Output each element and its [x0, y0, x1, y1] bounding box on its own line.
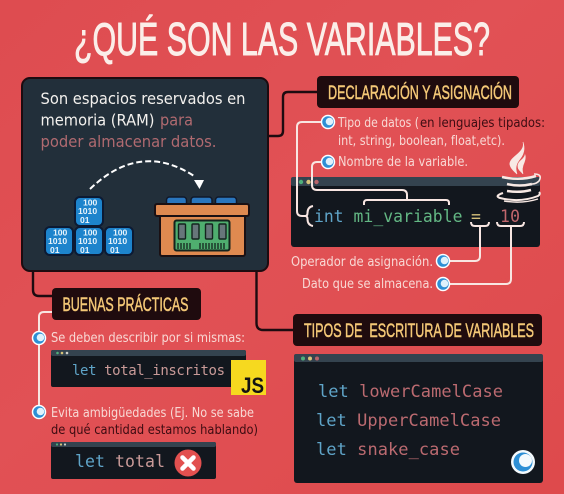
icon: java cup — [498, 142, 540, 202]
code window: total_inscritos — [51, 350, 246, 387]
icon: binary data blocks: 100 — [83, 198, 98, 208]
icon: binary data blocks: 1010 — [78, 206, 97, 216]
icon: dashed arrow from data to memory — [90, 161, 204, 189]
text: se deben describir: Se deben describir por si mismas: — [51, 331, 245, 346]
code lines: camel and snake case: let lowerCamelCase — [318, 382, 503, 402]
icon: binary data blocks: 100 — [53, 228, 68, 238]
heading: buenas prácticas: BUENAS PRÁCTICAS — [62, 293, 188, 316]
icon: bullet ambigüedades — [32, 406, 46, 418]
icon: binary data blocks: 1010 — [78, 236, 97, 246]
code lines: camel and snake case — [316, 382, 503, 460]
icon: binary data blocks: 01 — [110, 245, 120, 255]
icon: binary data blocks: 01 — [50, 245, 60, 255]
code: int mi_variable = 10 — [314, 207, 520, 226]
code: let total: let total — [75, 452, 165, 471]
icon: bullet describir — [32, 332, 46, 344]
connector: panel to declaration heading — [269, 92, 317, 136]
code lines: camel and snake case: let UpperCamelCase — [316, 411, 501, 431]
timeline: good practices — [39, 312, 52, 408]
code: int mi_variable = 10: mi_variable — [354, 207, 462, 226]
text: dato que se almacena: Dato que se almacena. — [302, 277, 433, 292]
icon: binary data blocks: 1010 — [108, 236, 127, 246]
icon: javascript logo: JS — [241, 373, 264, 398]
text: evita ambigüedades: Evita ambigüedades (Ej. No se sabe — [51, 406, 254, 421]
definition text: para — [160, 110, 193, 130]
code lines: camel and snake case: let snake_case — [316, 440, 460, 460]
code: int mi_variable = 10: 10 — [500, 207, 520, 226]
text: tipo de datos: int, string, boolean, float,etc). — [338, 134, 505, 149]
definition text: Son espacios reservados en — [40, 89, 246, 108]
icon: binary data blocks: 01 — [80, 215, 90, 225]
text: tipo de datos — [337, 116, 545, 149]
annotation lines: declaration parts — [297, 122, 524, 284]
icon: binary data blocks: 01 — [80, 245, 90, 255]
heading: tipos de escritura — [293, 314, 542, 346]
icon: binary data blocks: 1010 — [48, 236, 67, 246]
text: tipo de datos: Tipo de datos ( — [337, 116, 419, 131]
text: evita ambigüedades — [51, 406, 258, 438]
definition text: poder almacenar datos. — [40, 132, 216, 151]
heading: buenas prácticas — [52, 288, 201, 320]
icon: memory module in box — [155, 197, 249, 256]
text: operador de asignación: Operador de asignación. — [291, 254, 433, 270]
icon: binary data blocks: 100 — [113, 228, 128, 238]
code window: naming styles — [294, 354, 543, 483]
icon: bullet dato — [436, 278, 450, 290]
icon: binary data blocks — [45, 197, 133, 255]
text: evita ambigüedades: de qué cantidad estamos hablando) — [51, 422, 258, 438]
icon: javascript logo — [231, 360, 266, 398]
code: let total_inscritos: let total_inscritos — [72, 363, 225, 379]
code: int mi_variable = 10: = — [471, 207, 481, 226]
text: tipo de datos: en lenguajes tipados: — [420, 116, 545, 131]
heading: declaración y asignación — [317, 76, 519, 108]
text: nombre de la variable: Nombre de la variable. — [338, 155, 468, 170]
connector: panel to good practices heading — [33, 271, 53, 296]
code window: let total — [51, 442, 216, 479]
code window: declaration — [291, 177, 540, 247]
icon: brand logo — [511, 450, 535, 474]
icon: bullet tipo de datos — [322, 116, 334, 128]
icon: bullet nombre — [322, 156, 334, 168]
icon: bullet operador — [436, 254, 450, 268]
definition text — [40, 89, 246, 151]
icon: red cross — [174, 450, 202, 476]
connector: panel to writing types heading — [256, 271, 293, 330]
definition text: memoria (RAM) — [40, 110, 154, 130]
panel: definition — [22, 78, 268, 271]
code: int mi_variable = 10: int — [314, 207, 344, 226]
icon: binary data blocks: 100 — [83, 228, 98, 238]
